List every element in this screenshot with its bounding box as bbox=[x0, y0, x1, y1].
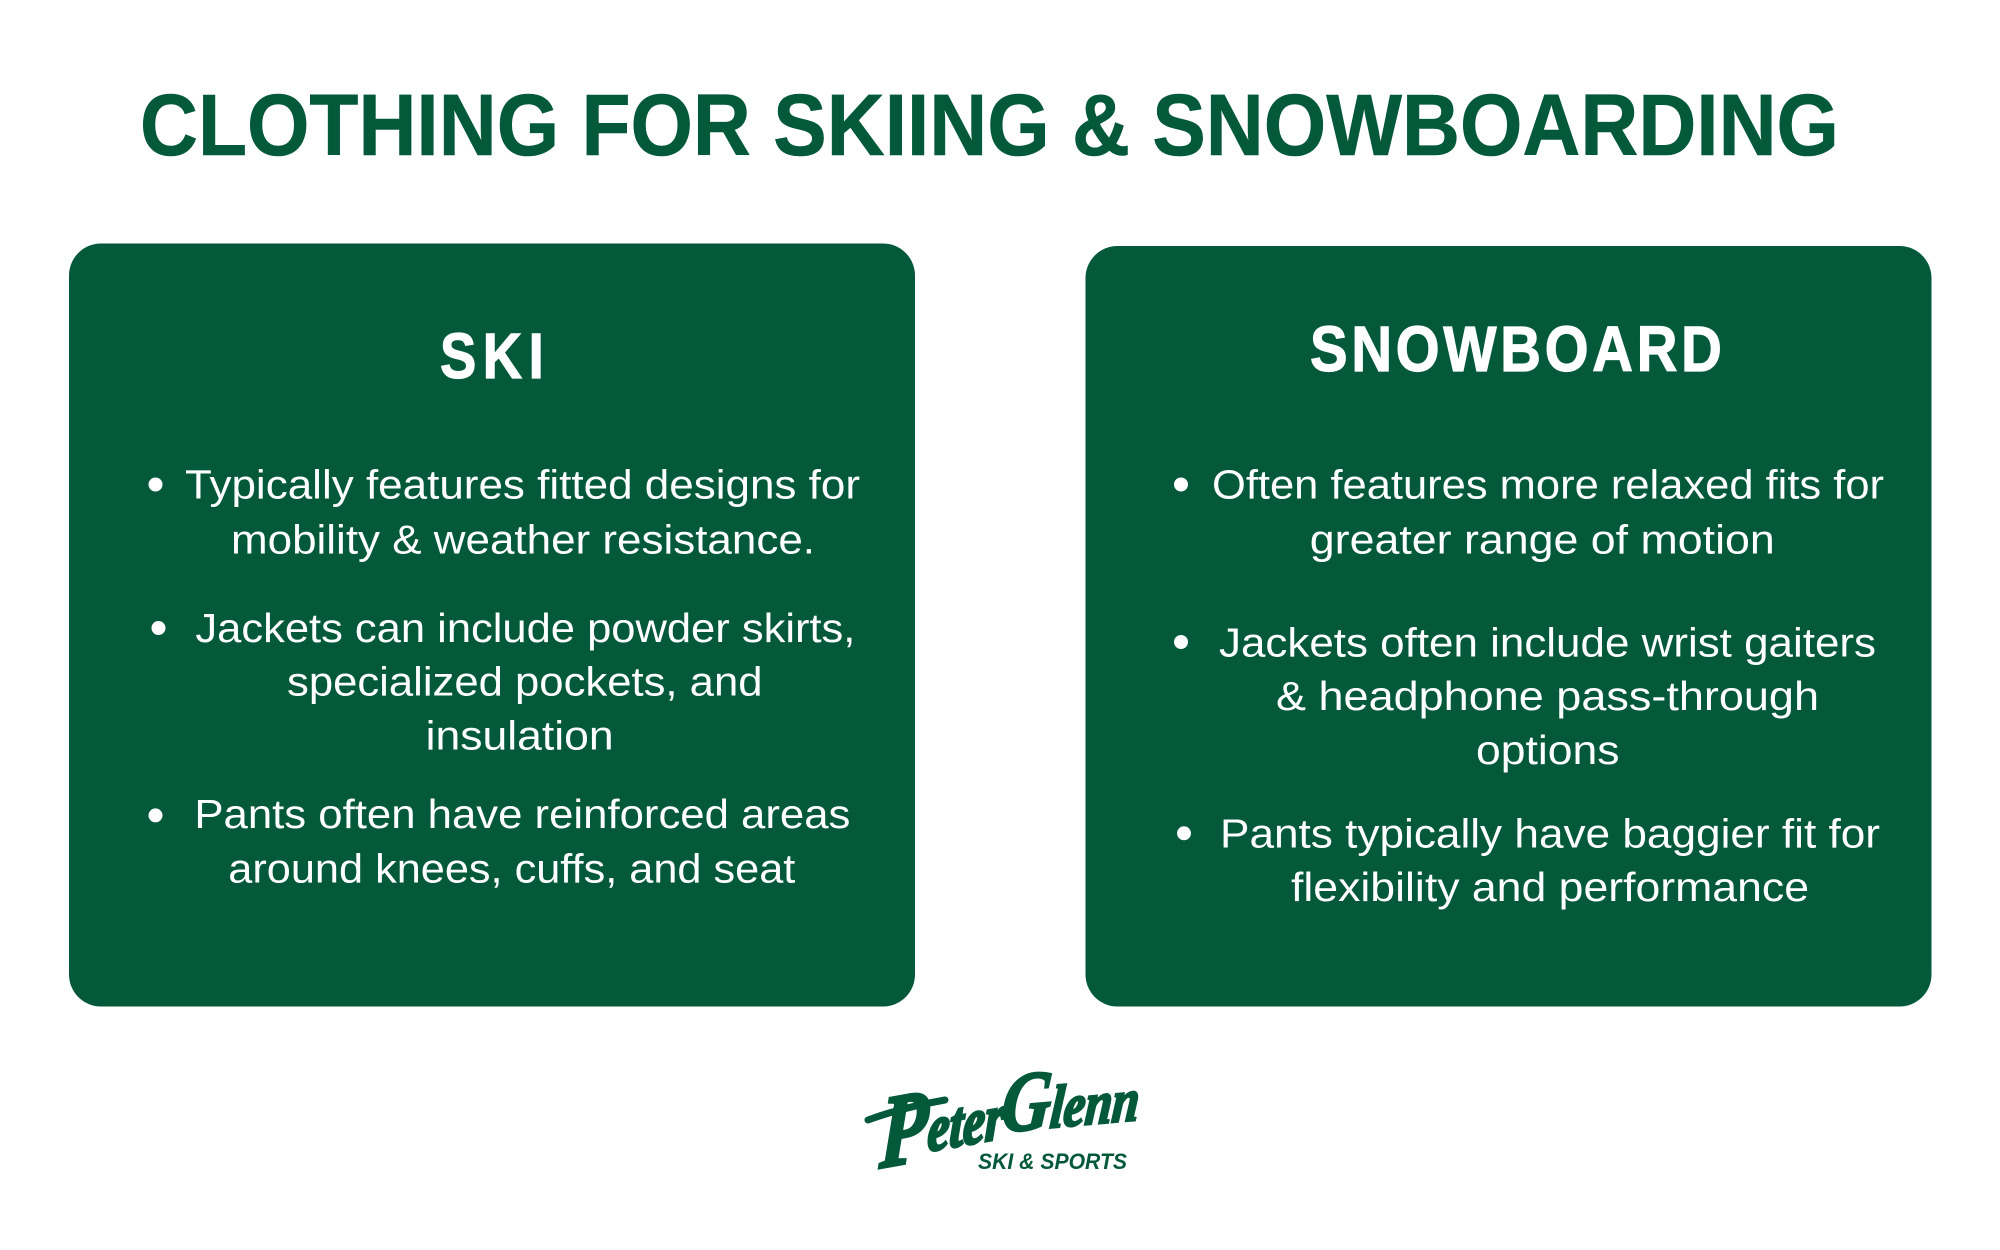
heading: ski: SKI bbox=[440, 320, 544, 392]
bullet point: pants: around knees, cuffs, and seat bbox=[228, 846, 796, 892]
bullet point: relaxed fits bbox=[1174, 461, 1884, 562]
bullet point: pants bbox=[148, 791, 850, 892]
bullet point: fitted designs: mobility & weather resistance. bbox=[231, 516, 815, 562]
bullet point: wrist gaiters: options bbox=[1476, 727, 1620, 773]
bullet point: fitted designs bbox=[148, 461, 860, 562]
logo: Peter Glenn Ski & Sports: SKI & SPORTS bbox=[978, 1149, 1127, 1174]
panel: snowboard bbox=[1086, 246, 1932, 1006]
bullet point: jackets: specialized pockets, and bbox=[287, 658, 762, 704]
bullet point: baggier pants bbox=[1177, 810, 1880, 910]
logo: Peter Glenn Ski & Sports: eter bbox=[927, 1079, 1007, 1166]
bullet point: pants: Pants often have reinforced areas bbox=[194, 791, 850, 837]
logo: Peter Glenn Ski & Sports: Glenn bbox=[998, 1044, 1144, 1151]
bullet point: wrist gaiters: & headphone pass-through bbox=[1276, 673, 1819, 719]
bullet point: wrist gaiters: Jackets often include wrist gaiters bbox=[1219, 620, 1876, 666]
bullet point: relaxed fits: greater range of motion bbox=[1310, 516, 1775, 562]
bullet point: fitted designs: Typically features fitted designs for bbox=[185, 461, 860, 507]
heading: snowboard: SNOWBOARD bbox=[1310, 313, 1722, 385]
bullet point: baggier pants: flexibility and performance bbox=[1291, 864, 1809, 910]
bullet point: jackets: Jackets can include powder skirts, bbox=[195, 605, 855, 651]
title: CLOTHING FOR SKIING & SNOWBOARDING bbox=[140, 77, 1839, 174]
panel: ski bbox=[69, 244, 915, 1006]
bullet point: jackets: insulation bbox=[426, 712, 614, 758]
bullet point: jackets bbox=[152, 605, 855, 758]
bullet point: relaxed fits: Often features more relaxed fits for bbox=[1212, 461, 1884, 507]
bullet point: baggier pants: Pants typically have baggier fit for bbox=[1220, 810, 1880, 856]
bullet point: wrist gaiters bbox=[1174, 620, 1876, 773]
logo: Peter Glenn Ski & Sports bbox=[868, 1044, 1144, 1192]
logo: Peter Glenn Ski & Sports: P bbox=[877, 1067, 931, 1192]
